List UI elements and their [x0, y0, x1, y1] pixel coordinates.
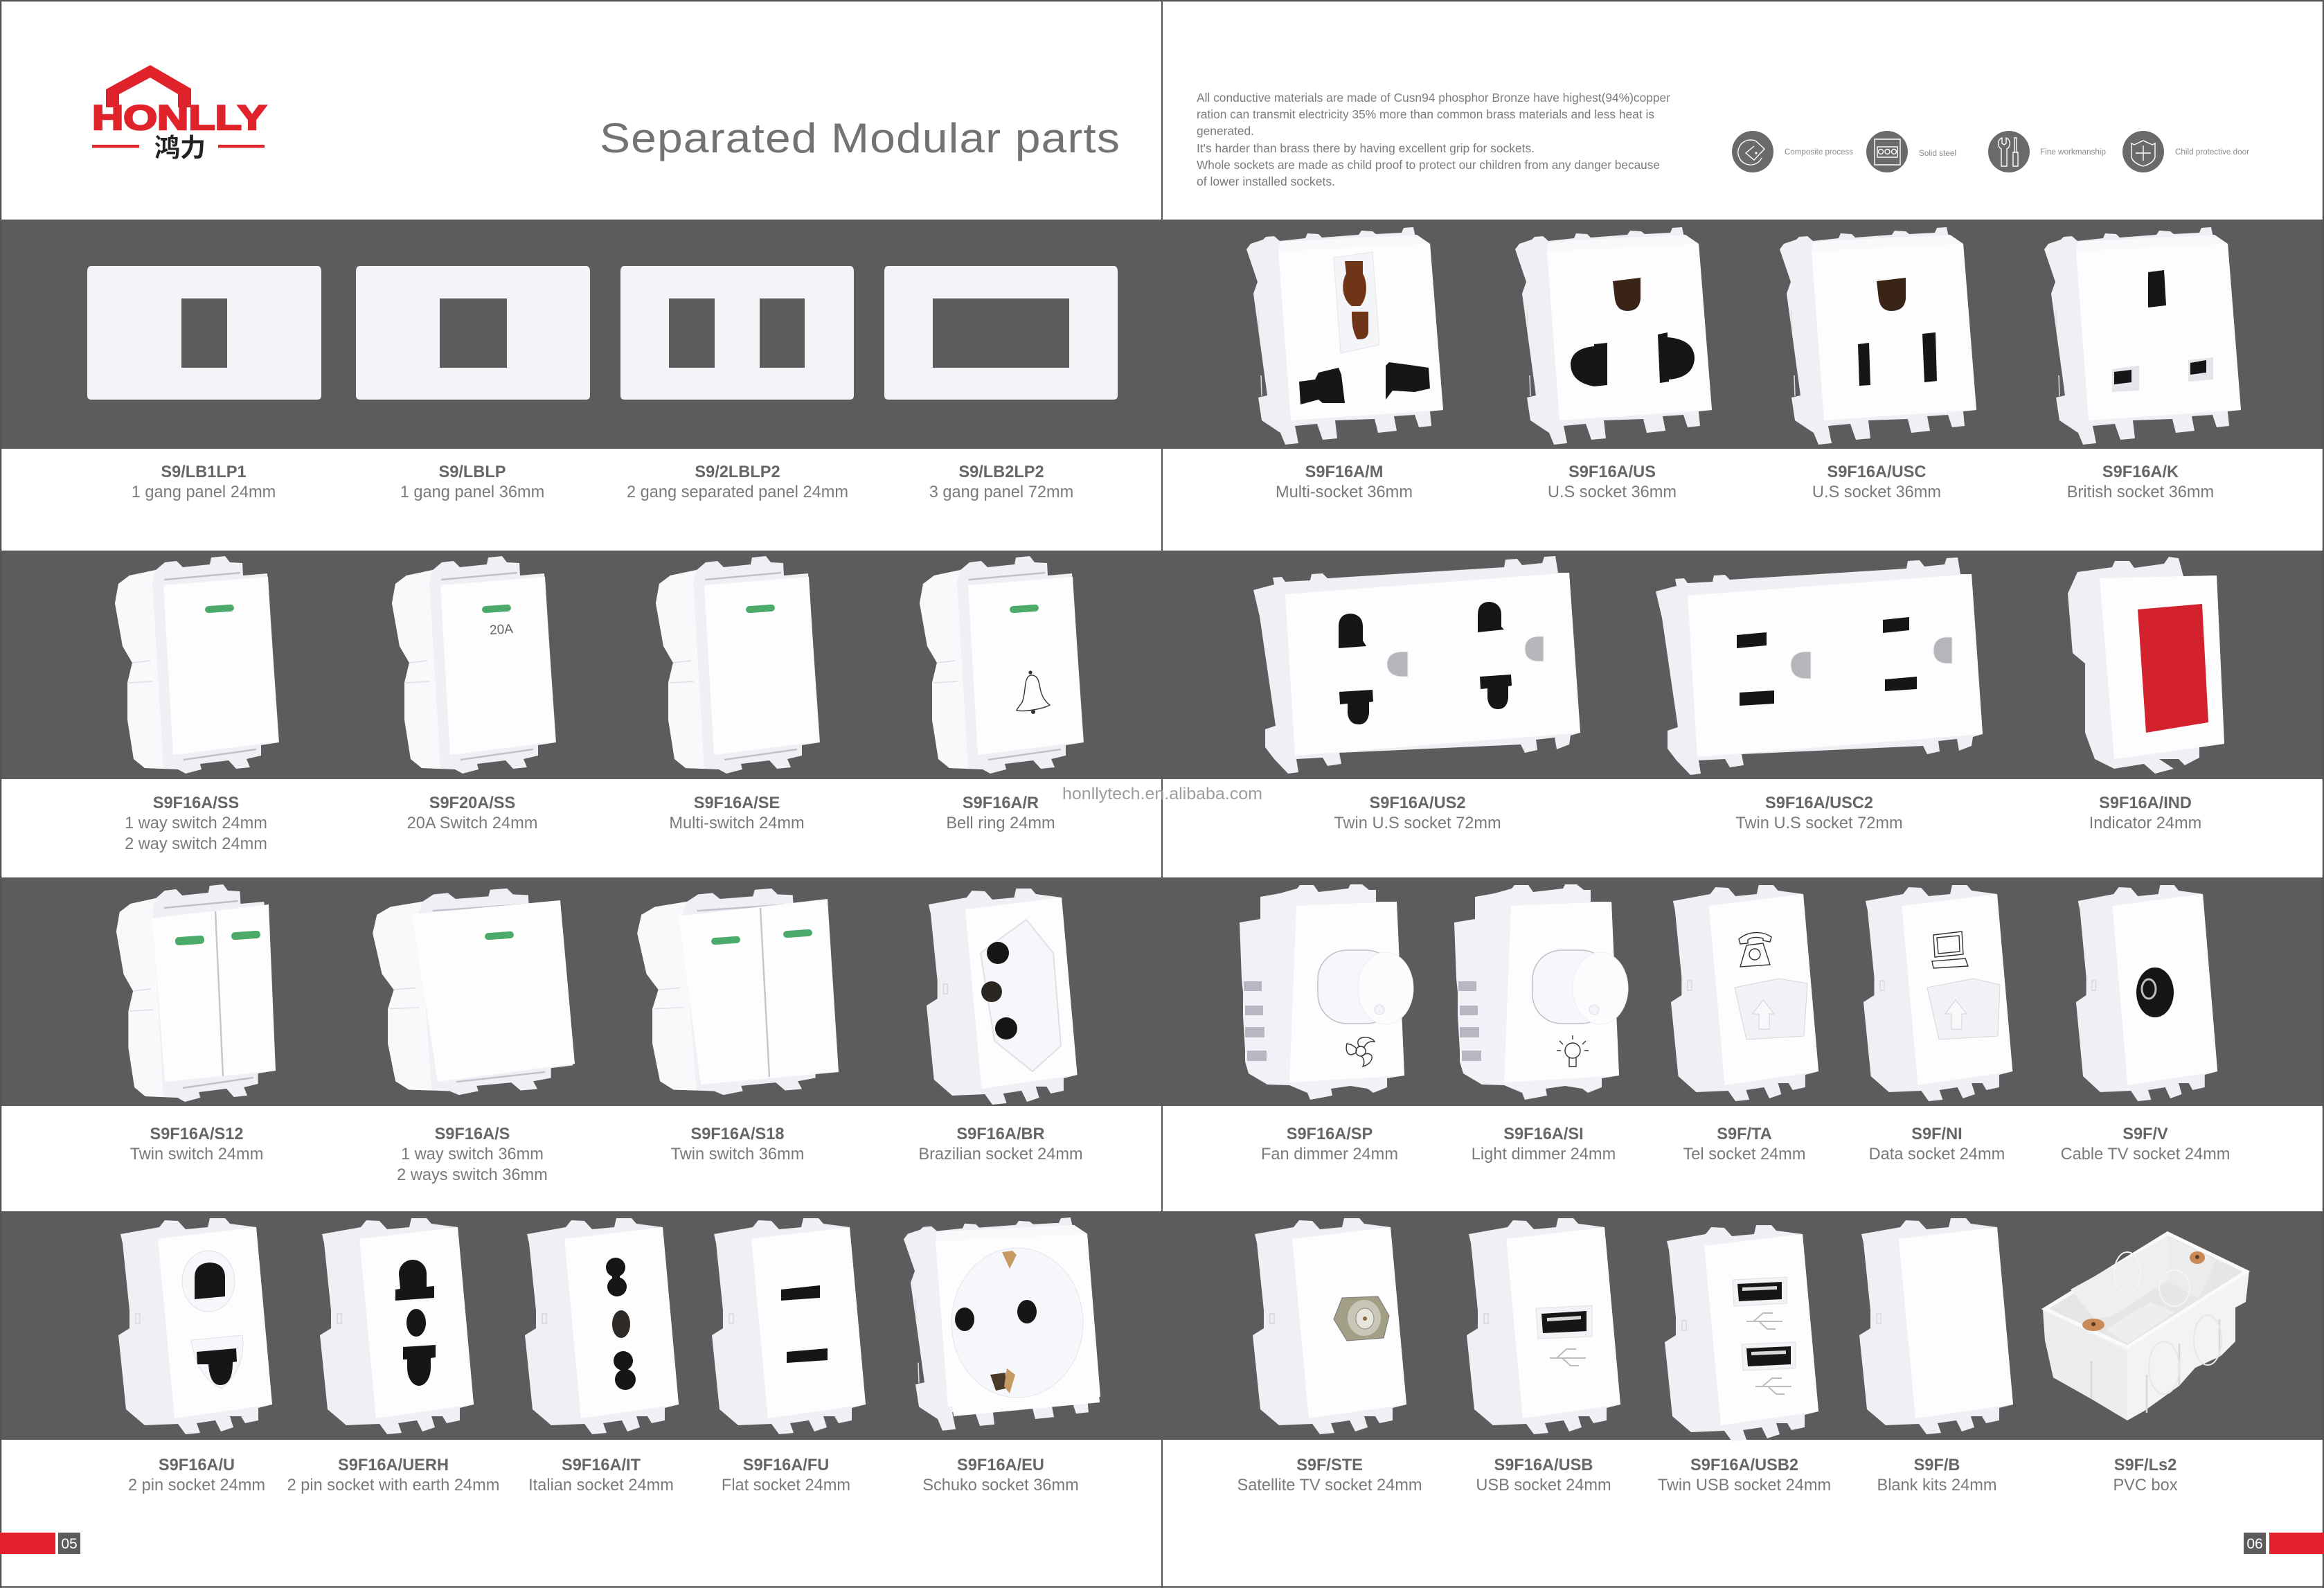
- caption: [671, 1125, 804, 1163]
- caption: S9F16A/SS: [153, 794, 239, 812]
- product: S9F16A/IT: [525, 1218, 679, 1495]
- caption: 2 pin socket 24mm: [128, 1477, 265, 1495]
- caption: Indicator 24mm: [2089, 814, 2201, 832]
- caption: [2067, 463, 2214, 501]
- icon: bulb: [1557, 1035, 1589, 1067]
- caption: S9/2LBLP2: [695, 463, 780, 481]
- product: S9F16A/SS: [115, 556, 279, 853]
- caption: S9/LBLP: [438, 463, 506, 481]
- caption: British socket 36mm: [2067, 483, 2214, 501]
- caption: S9F16A/UERH: [338, 1456, 449, 1474]
- product: S9F16A/USB: [1467, 1218, 1620, 1495]
- caption: S9/LB2LP2: [958, 463, 1044, 481]
- icon: fan: [1346, 1037, 1375, 1067]
- caption: [2089, 794, 2201, 832]
- caption: Data socket 24mm: [1869, 1145, 2005, 1163]
- caption: [1276, 463, 1413, 501]
- title: Separated Modular parts: [600, 115, 1120, 161]
- caption: [946, 794, 1055, 832]
- caption: Satellite TV socket 24mm: [1237, 1477, 1422, 1495]
- feature: fine workmanship: [1988, 131, 2106, 172]
- caption: S9F16A/SP: [1287, 1125, 1373, 1143]
- product: S9F20A/SS: 20A: [489, 622, 514, 638]
- caption: [1735, 794, 1903, 832]
- caption: S9F16A/US: [1568, 463, 1656, 481]
- caption: [287, 1456, 499, 1495]
- caption: [1334, 794, 1501, 832]
- caption: [1548, 463, 1677, 501]
- caption: [1237, 1456, 1422, 1495]
- caption: 2 way switch 24mm: [125, 835, 267, 853]
- caption: S9F16A/BR: [956, 1125, 1045, 1143]
- caption: Italian socket 24mm: [528, 1477, 674, 1495]
- caption: [1476, 1456, 1611, 1495]
- caption: [1869, 1125, 2005, 1163]
- caption: S9F16A/K: [2102, 463, 2179, 481]
- product: S9F16A/FU: [712, 1218, 866, 1495]
- product: S9F16A/SI: [1454, 884, 1628, 1163]
- caption: [2061, 1125, 2230, 1163]
- caption: S9F16A/USB: [1494, 1456, 1593, 1474]
- product: S9F16A/S18: [637, 889, 839, 1163]
- caption: U.S socket 36mm: [1812, 483, 1941, 501]
- band: row 2: [0, 551, 2324, 779]
- page number: 05: [0, 1533, 80, 1554]
- product: S9F20A/SS: [392, 556, 556, 832]
- logo: HONLLY: 鸿力: [154, 127, 206, 164]
- feature: composite process: Composite process: [1785, 148, 1853, 157]
- caption: S9F16A/EU: [957, 1456, 1044, 1474]
- feature: child protective door: [2122, 131, 2249, 172]
- caption: PVC box: [2113, 1477, 2178, 1495]
- feature: child protective door: Child protective door: [2175, 148, 2249, 157]
- product: S9F16A/SP: [1240, 884, 1413, 1163]
- caption: USB socket 24mm: [1476, 1477, 1611, 1495]
- caption: Multi-switch 24mm: [669, 814, 805, 832]
- watermark: honllytech.en.alibaba.com: [1062, 785, 1262, 803]
- product: S9F16A/BR: [918, 889, 1083, 1163]
- product: S9F/STE: [1237, 1218, 1422, 1495]
- caption: 2 gang separated panel 24mm: [627, 483, 848, 501]
- product: S9/LBLP: [356, 266, 590, 501]
- caption: S9F/NI: [1911, 1125, 1963, 1143]
- caption: S9F16A/R: [963, 794, 1039, 812]
- caption: S9F16A/USC: [1827, 463, 1926, 481]
- caption: S9F/V: [2122, 1125, 2168, 1143]
- caption: S9F16A/S: [435, 1125, 510, 1143]
- band: row 3: [0, 877, 2324, 1106]
- caption: [128, 1456, 265, 1495]
- caption: [922, 1456, 1079, 1495]
- caption: [528, 1456, 674, 1495]
- caption: S9F16A/FU: [743, 1456, 829, 1474]
- caption: S9F16A/US2: [1369, 794, 1466, 812]
- caption: Cable TV socket 24mm: [2061, 1145, 2230, 1163]
- icon: usb: [1550, 1349, 1586, 1366]
- caption: Twin switch 36mm: [671, 1145, 804, 1163]
- page number: 05: 05: [61, 1536, 78, 1552]
- caption: 3 gang panel 72mm: [929, 483, 1073, 501]
- caption: S9F/STE: [1296, 1456, 1363, 1474]
- caption: S9F16A/USB2: [1690, 1456, 1798, 1474]
- caption: 1 way switch 24mm: [125, 814, 267, 832]
- product: S9F/B: [1859, 1218, 2013, 1495]
- product: S9/2LBLP2: [620, 266, 854, 501]
- page number: 06: 06: [2246, 1536, 2263, 1552]
- caption: S9F/Ls2: [2114, 1456, 2176, 1474]
- caption: [130, 1125, 263, 1163]
- caption: Brazilian socket 24mm: [918, 1145, 1083, 1163]
- product: S9F16A/SE: [656, 556, 820, 832]
- caption: S9F/B: [1914, 1456, 1960, 1474]
- caption: S9F20A/SS: [429, 794, 515, 812]
- product: S9F16A/M: [1246, 227, 1443, 501]
- feature: solid steel: Solid steel: [1919, 150, 1956, 158]
- caption: S9F16A/USC2: [1765, 794, 1873, 812]
- caption: [1472, 1125, 1616, 1163]
- caption: S9F16A/S12: [150, 1125, 244, 1143]
- caption: [1261, 1125, 1398, 1163]
- text block: materials description: ration can transmit electricity 35% more than common brass materials and less heat is: [1197, 107, 1654, 121]
- text block: materials description: All conductive materials are made of Cusn94 phosphor Bronze have highest(94%)copper: [1197, 91, 1670, 105]
- caption: [918, 1125, 1083, 1163]
- icon: telephone: [1739, 933, 1771, 967]
- product: S9F16A/USC: [1780, 227, 1976, 501]
- text block: materials description: Whole sockets are made as child proof to protect our children from any danger because: [1197, 158, 1660, 172]
- logo: HONLLY: HONLLY: [92, 98, 267, 137]
- product: S9/LB2LP2: [884, 266, 1118, 501]
- caption: 20A Switch 24mm: [407, 814, 537, 832]
- caption: 2 ways switch 36mm: [397, 1166, 548, 1184]
- caption: 1 gang panel 24mm: [132, 483, 276, 501]
- caption: Bell ring 24mm: [946, 814, 1055, 832]
- caption: S9F16A/SE: [694, 794, 780, 812]
- caption: [1877, 1456, 1997, 1495]
- caption: [2113, 1456, 2178, 1495]
- product: S9F16A/K: [2044, 227, 2241, 501]
- caption: 1 way switch 36mm: [401, 1145, 544, 1163]
- caption: S9F16A/IT: [562, 1456, 641, 1474]
- caption: [1658, 1456, 1831, 1495]
- product: S9F16A/S12: [116, 884, 276, 1163]
- product: S9F16A/US2: [1253, 556, 1580, 832]
- caption: Twin U.S socket 72mm: [1735, 814, 1903, 832]
- caption: [722, 1456, 850, 1495]
- text block: materials description: of lower installed sockets.: [1197, 175, 1335, 188]
- product: S9F/TA: [1671, 885, 1818, 1163]
- text block: materials description: generated.: [1197, 124, 1254, 138]
- caption: Fan dimmer 24mm: [1261, 1145, 1398, 1163]
- caption: S9F16A/U: [159, 1456, 235, 1474]
- caption: [627, 463, 848, 501]
- caption: Blank kits 24mm: [1877, 1477, 1997, 1495]
- caption: [400, 463, 544, 501]
- caption: [397, 1125, 548, 1184]
- caption: S9F/TA: [1717, 1125, 1772, 1143]
- product: S9F16A/R: [920, 556, 1084, 832]
- caption: [132, 463, 276, 501]
- text block: materials description: It's harder than brass there by having excellent grip for sockets.: [1197, 141, 1535, 155]
- caption: Twin USB socket 24mm: [1658, 1477, 1831, 1495]
- page number: 06: [2244, 1533, 2324, 1554]
- caption: S9F16A/M: [1305, 463, 1383, 481]
- icon: computer: [1932, 931, 1968, 968]
- product: S9F/NI: [1863, 885, 2012, 1163]
- product: S9/LB1LP1: [87, 266, 321, 501]
- caption: [1683, 1125, 1806, 1163]
- caption: S9/LB1LP1: [161, 463, 247, 481]
- feature: composite process: [1732, 131, 1853, 172]
- caption: Twin switch 24mm: [130, 1145, 263, 1163]
- product: S9F16A/USC2: [1656, 557, 1983, 832]
- text block: materials description: [1197, 91, 1670, 188]
- caption: Multi-socket 36mm: [1276, 483, 1413, 501]
- product: S9F/Ls2 PVC box: [2043, 1231, 2249, 1495]
- icon: usb lower: [1755, 1378, 1791, 1394]
- band: row 4: [0, 1211, 2324, 1440]
- feature: solid steel: [1866, 131, 1956, 172]
- product: S9F16A/U: [118, 1218, 272, 1495]
- caption: S9F16A/SI: [1503, 1125, 1584, 1143]
- icon: usb upper: [1746, 1313, 1782, 1329]
- logo: HONLLY: [92, 65, 267, 164]
- caption: [407, 794, 537, 832]
- caption: S9F16A/IND: [2099, 794, 2192, 812]
- product: S9F16A/USB2: [1658, 1225, 1831, 1495]
- caption: Flat socket 24mm: [722, 1477, 850, 1495]
- caption: U.S socket 36mm: [1548, 483, 1677, 501]
- caption: [1812, 463, 1941, 501]
- caption: [125, 794, 267, 853]
- caption: Twin U.S socket 72mm: [1334, 814, 1501, 832]
- caption: 1 gang panel 36mm: [400, 483, 544, 501]
- feature: fine workmanship: Fine workmanship: [2040, 148, 2106, 157]
- caption: 2 pin socket with earth 24mm: [287, 1477, 499, 1495]
- product: S9F16A/EU: [904, 1217, 1100, 1495]
- caption: [669, 794, 805, 832]
- product: S9F16A/US: [1515, 227, 1712, 501]
- caption: Light dimmer 24mm: [1472, 1145, 1616, 1163]
- caption: [929, 463, 1073, 501]
- product: S9F/V: [2061, 885, 2230, 1163]
- product: S9F16A/S: [373, 889, 575, 1184]
- caption: S9F16A/S18: [690, 1125, 785, 1143]
- caption: Tel socket 24mm: [1683, 1145, 1806, 1163]
- band: row 1: [0, 220, 2324, 449]
- product: S9F16A/UERH: [287, 1218, 499, 1495]
- caption: Schuko socket 36mm: [922, 1477, 1079, 1495]
- product: S9F16A/IND: [2068, 557, 2224, 832]
